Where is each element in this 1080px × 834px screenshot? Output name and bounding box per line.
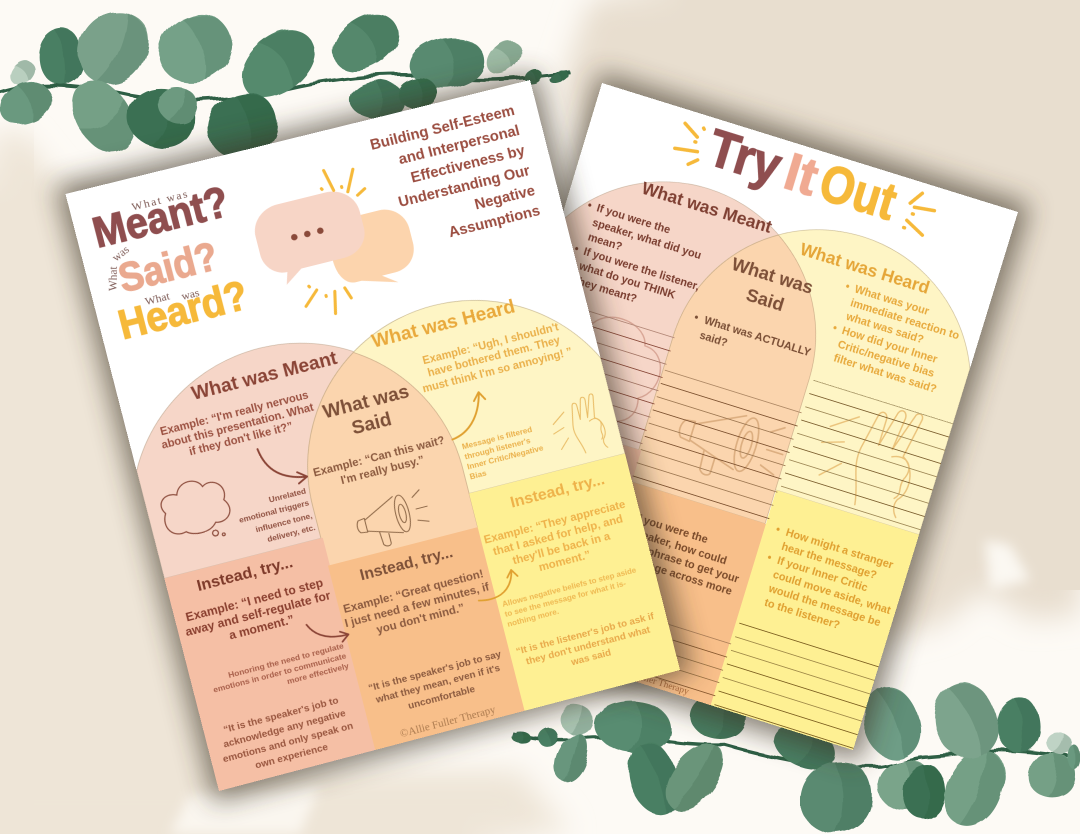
text: allows negative beliefs: [501, 566, 643, 629]
text: meant prompts: •: [587, 200, 594, 212]
icon: thought cloud: [157, 473, 236, 549]
text: speaker job said: uncomfortable: [411, 691, 482, 718]
title: What was Said?: What: [107, 266, 120, 292]
text: unrelated triggers: emotional triggers: [239, 501, 312, 527]
text: speaker job meant: own experience: [255, 747, 332, 775]
arch: what was heard: [640, 191, 998, 535]
title: What was Said?: Said?: [114, 234, 223, 302]
text: instead example heard: that I asked for help, and: [497, 521, 633, 564]
text: listener job: they don't understand what: [531, 634, 662, 675]
text: meant prompts: mean?: [587, 232, 624, 254]
text: instead example said: you don't mind.”: [378, 609, 471, 642]
text: heard example: Example: “Ugh, I shouldn't: [425, 326, 568, 371]
text: instead example meant: Example: “I need to step: [185, 579, 327, 626]
heading: instead try said: Instead, try...: [361, 550, 459, 589]
title: What was Meant?: Meant?: [88, 179, 235, 258]
text: said prompt: said?: [699, 330, 730, 350]
text: said example: Example: “Can this wait?: [314, 439, 450, 483]
text: heard prompts: •: [843, 280, 850, 293]
arrow: instead said to heard: [473, 569, 521, 602]
text: heard lower prompts: hear the message?: [781, 542, 879, 583]
title: Try It Out: [701, 119, 903, 232]
heading: what was heard: What was Heard: [373, 300, 523, 355]
icon: rays around bubbles: [274, 162, 393, 320]
icon: title rays: [672, 119, 938, 238]
text: said rephrase prompt: speaker, how could: [631, 528, 730, 569]
heading: Building Self-Esteem: Assumptions: [451, 205, 549, 244]
text: instead example said: I just need a few minutes, if: [346, 588, 496, 635]
text: instead example said: [340, 568, 494, 644]
icon: megaphone: [352, 489, 434, 552]
text: meant prompts: speaker, what did you: [592, 217, 703, 262]
text: said rephrase prompt: you phrase to get your: [627, 541, 743, 587]
text: heard prompts: immediate reaction to: [848, 297, 959, 342]
text: heard lower prompts: could move aside, what: [773, 570, 893, 618]
text: heard prompts: [823, 281, 965, 398]
text: message filtered: [461, 423, 547, 481]
text: heard prompts: •: [831, 322, 838, 335]
icon: faded megaphone: [669, 398, 790, 495]
text: speaker job said: [367, 649, 509, 721]
heading: Building Self-Esteem: and Interpersonal: [400, 124, 528, 170]
arch: what was said: [629, 214, 847, 524]
text: heard prompts: Critic/negative bias: [836, 338, 935, 380]
heading: what was said: Said: [352, 413, 397, 443]
heading: what was said: What was: [729, 254, 815, 298]
title: What was Said?: [97, 223, 222, 305]
text: allows negative beliefs: Allows negative beliefs to step aside: [507, 574, 647, 616]
text: said prompt: [688, 312, 813, 374]
heading: what was meant: What was Meant: [640, 178, 774, 237]
lines: heard writing: [781, 380, 953, 530]
icon: faded hand: [807, 388, 929, 518]
text: honoring the need: emotions in order to communicate: [213, 655, 350, 697]
row: heard lower: [469, 454, 680, 711]
text: said rephrase prompt: •: [626, 511, 633, 523]
text: speaker job meant: “It is the speaker's job to: [223, 700, 342, 739]
text: heard prompts: what was said?: [843, 310, 924, 346]
arch: what was meant: [504, 149, 853, 492]
text: honoring the need: [209, 640, 350, 705]
text: meant example: about this presentation. What: [161, 404, 317, 453]
foliage: top eucalyptus branch: [0, 0, 570, 164]
heading: Building Self-Esteem: Understanding Our: [400, 164, 538, 213]
text: heard example: have bothered them. They: [431, 339, 570, 383]
text: meant example: Example: “I'm really nervous: [159, 392, 312, 439]
text: meant example: [157, 389, 319, 464]
text: instead example heard: moment.”: [544, 557, 600, 581]
panel: What was Meant, Said, Heard worksheet: [66, 80, 680, 791]
text: said rephrase prompt: message across more: [623, 554, 735, 600]
text: said rephrase prompt: If you were the: [635, 513, 711, 548]
text: said prompt: •: [693, 312, 701, 325]
row: heard lower: [711, 490, 919, 750]
text: allows negative beliefs: nothing more.: [512, 615, 567, 636]
arch: what was said: [278, 334, 478, 567]
heading: Building Self-Esteem: Building Self-Esteem: [371, 103, 523, 155]
text: allows negative beliefs: to see the message for what it is-: [510, 587, 636, 626]
heading: what was said: [722, 254, 816, 322]
text: unrelated triggers: [235, 486, 317, 550]
text: heard lower prompts: If your Inner Critic: [777, 556, 870, 595]
panel: Try It Out worksheet: [440, 83, 1018, 750]
text: meant example: if they don't like it?”: [189, 423, 296, 460]
text: speaker job meant: emotions and only speak on: [223, 726, 357, 768]
text: speaker job meant: [215, 693, 358, 779]
text: heard prompts: What was your: [852, 283, 930, 318]
text: heard lower prompts: would the message be: [768, 584, 883, 630]
text: unrelated triggers: delivery, etc.: [268, 526, 318, 547]
text: message filtered: Message is filtered: [466, 430, 540, 456]
text: meant prompts: [564, 200, 714, 322]
text: listener job: was said: [577, 657, 621, 677]
heading: instead try heard: Instead, try...: [514, 477, 615, 517]
text: unrelated triggers: Unrelated: [269, 490, 309, 507]
text: instead example meant: away and self-regulate for: [184, 592, 334, 641]
text: message filtered: through listener's: [468, 441, 538, 466]
icon: hand at ear: [546, 393, 609, 459]
text: instead example heard: Example: “They appreciate: [488, 506, 637, 553]
text: honoring the need: more effectively: [287, 665, 353, 690]
text: instead example heard: they'll be back in a: [517, 538, 621, 574]
text: heard prompts: How did your Inner: [840, 325, 938, 366]
heading: what was said: [321, 382, 417, 445]
text: said rephrase prompt: [607, 509, 749, 613]
text: message filtered: Bias: [474, 474, 493, 487]
text: listener job: [515, 611, 662, 681]
foliage: bottom eucalyptus branch: [510, 673, 1080, 834]
lines: meant writing: [506, 295, 675, 444]
text: meant prompts: If you were the listener,: [583, 246, 701, 293]
heading: what was meant: What was Meant: [190, 351, 342, 406]
text: heard lower prompts: to the listener?: [765, 598, 843, 633]
heading: Building Self-Esteem: Negative: [478, 185, 544, 216]
text: copyright: ©Allie Fuller Therapy: [402, 712, 503, 746]
row: meant lower: [440, 408, 641, 663]
heading: what was said: What was: [323, 385, 415, 426]
icon: faded cloud: [529, 299, 672, 431]
text: instead example said: Example: “Great question!: [345, 575, 490, 620]
title: What was Heard?: was: [181, 288, 202, 304]
row: meant lower: [164, 538, 377, 791]
row: said lower: [328, 527, 526, 750]
title: What was Heard?: What: [144, 291, 172, 309]
text: listener job: “It is the listener's job to ask if: [521, 620, 666, 665]
text: instead example meant: [180, 575, 336, 653]
text: heard lower prompts: •: [767, 553, 775, 566]
text: speaker job said: what they mean, even if it's: [377, 670, 507, 711]
text: heard lower prompts: •: [776, 525, 783, 537]
text: meant prompts: they meant?: [574, 275, 639, 306]
title: Try It Out: Try: [701, 119, 787, 196]
text: heard lower prompts: [753, 524, 905, 645]
heading: what was said: Said: [744, 285, 786, 315]
heading: Building Self-Esteem: [368, 102, 542, 254]
text: meant prompts: If you were the: [596, 203, 672, 237]
arrow: said to heard: [443, 391, 493, 440]
text: said example: I'm really busy.”: [342, 459, 430, 491]
text: instead example meant: a moment.”: [228, 616, 297, 645]
arch: what was heard: [272, 269, 625, 532]
shadow of right sheet: [430, 72, 1030, 762]
text: instead example heard: [483, 499, 637, 586]
title: Try It Out: It: [777, 142, 823, 207]
text: speaker job said: “It is the speaker's job to say: [370, 656, 508, 699]
text: meant prompts: what do you THINK: [578, 260, 677, 302]
row: said lower: [575, 481, 768, 706]
heading: Building Self-Esteem: Effectiveness by: [413, 144, 534, 188]
text: honoring the need: Honoring the need to regulate: [228, 645, 347, 683]
text: said rephrase prompt: clearly?: [619, 568, 662, 592]
title: What was Said?: was: [110, 244, 132, 265]
icon: speech bubbles: [249, 175, 422, 313]
arrow: meant to said: [258, 439, 308, 491]
text: copyright: ©Allie Fuller Therapy: [608, 664, 693, 700]
text: heard example: [415, 320, 573, 395]
text: meant prompts: •: [574, 243, 581, 256]
title: What was Meant?: What was: [131, 189, 190, 214]
title: Try It Out: Out: [812, 153, 901, 232]
text: unrelated triggers: influence tone,: [256, 514, 315, 537]
text: message filtered: Inner Critic/Negative: [471, 449, 552, 476]
text: heard lower prompts: How might a stranger: [786, 528, 896, 572]
heading: instead try meant: Instead, try...: [196, 556, 296, 597]
title: What was Heard?: Heard?: [114, 273, 253, 349]
lines: said lower writing: [579, 601, 731, 696]
lines: heard lower writing: [714, 623, 879, 748]
arrow: instead meant to said: [306, 615, 350, 649]
lines: said writing: [633, 370, 802, 519]
heading: what was heard: What was Heard: [797, 239, 930, 297]
text: said prompt: What was ACTUALLY: [703, 315, 813, 359]
text: heard prompts: filter what was said?: [832, 352, 937, 395]
arch: what was meant: [115, 308, 471, 578]
text: heard example: must think I'm so annoying! ”: [425, 351, 581, 399]
text: speaker job meant: acknowledge any negative: [223, 713, 350, 753]
